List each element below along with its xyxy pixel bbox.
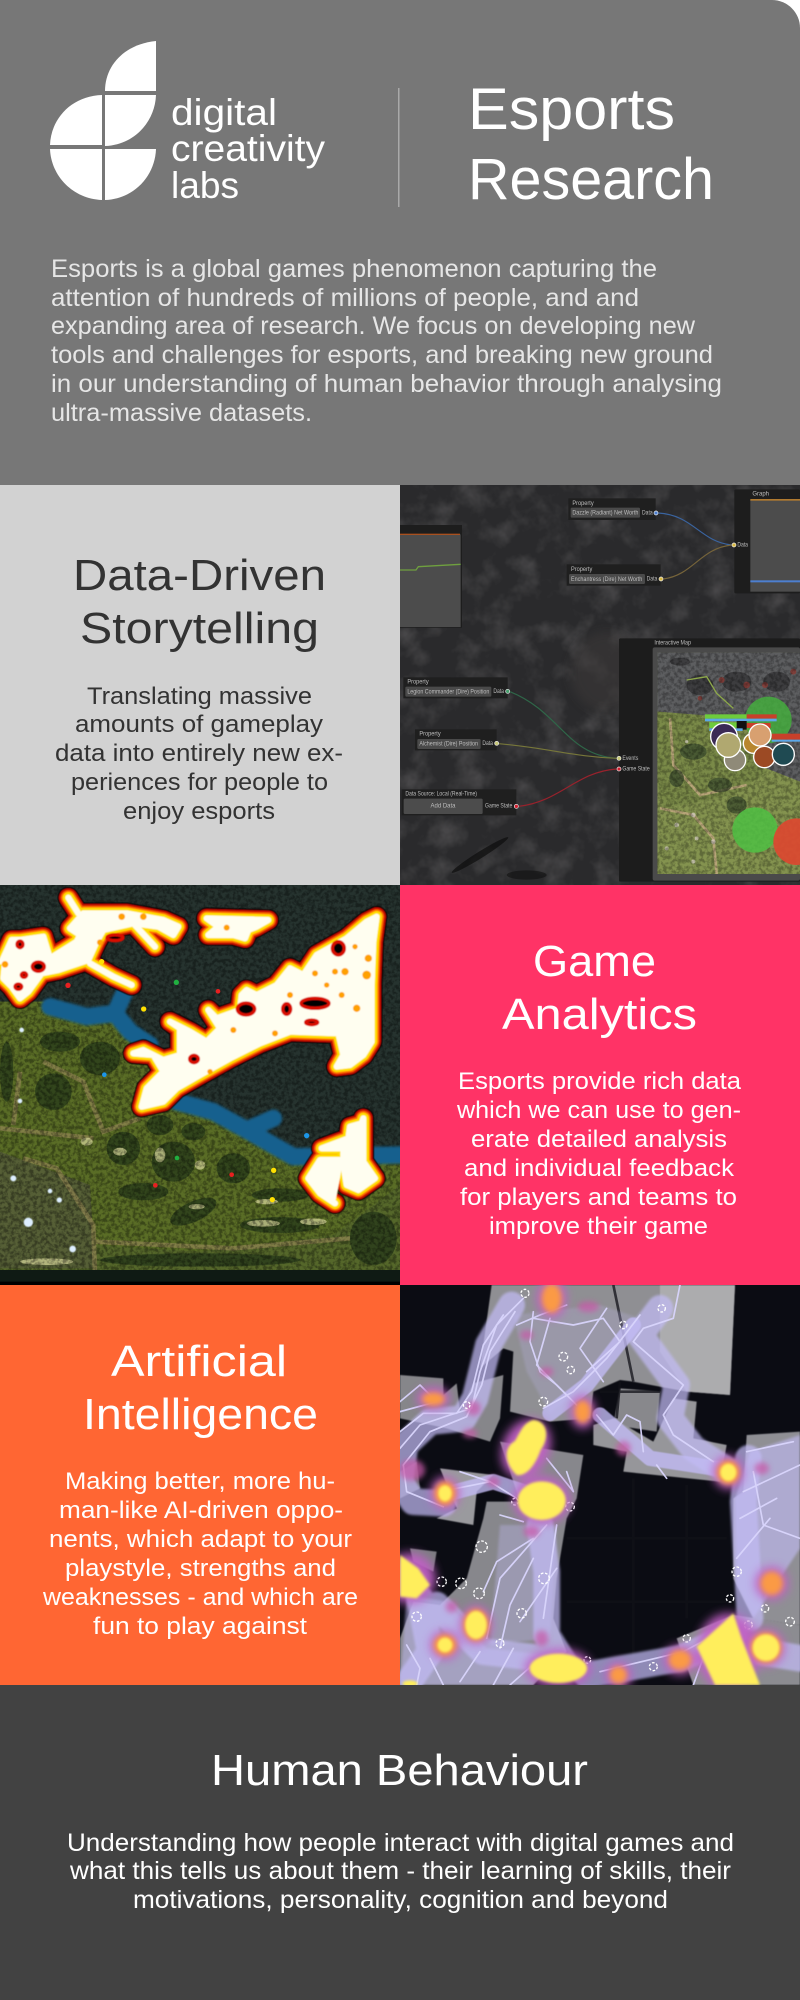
player dots: [65, 959, 309, 1202]
body text: storytelling: enjoy esports: [123, 798, 275, 825]
panel: game analytics: [400, 885, 800, 1285]
body text: artificial intelligence: playstyle, strengths and: [65, 1555, 336, 1582]
icon: digital creativity labs leaf logo: [50, 41, 156, 200]
body text: human behaviour: Understanding how people interact with digital games and: [67, 1829, 734, 1857]
body text: game analytics: which we can use to gen-: [456, 1097, 741, 1124]
node: alchemist position: [415, 729, 499, 750]
title: Research: [468, 147, 714, 212]
node: interactive map: Game State: [622, 767, 650, 773]
body text: storytelling: Translating massive: [87, 683, 312, 710]
image: AI movement trace map: [400, 1285, 800, 1685]
heading: game analytics: Game: [533, 937, 656, 986]
node: alchemist position: Data: [482, 741, 494, 747]
heading: artificial intelligence: [83, 1337, 318, 1439]
body text: artificial intelligence: Making better, more hu-: [65, 1468, 335, 1495]
trace map: waypoint markers: [412, 1289, 794, 1671]
node: enchantress net worth: Enchantress (Dire) Net Worth: [571, 577, 642, 583]
node: enchantress net worth: Property: [571, 567, 592, 573]
body text: storytelling: periences for people to: [71, 769, 328, 796]
intro text: ultra-massive datasets.: [51, 399, 312, 427]
intro text: expanding area of research. We focus on developing new: [51, 312, 696, 340]
node: alchemist position: Property: [419, 732, 441, 738]
body text: game analytics: improve their game: [489, 1213, 708, 1240]
heading: artificial intelligence: Artificial: [111, 1337, 287, 1386]
panel: header: [0, 0, 800, 485]
heading: artificial intelligence: Intelligence: [83, 1390, 318, 1439]
heading: data-driven storytelling: Data-Driven: [73, 551, 326, 600]
node: graph: [732, 489, 800, 593]
node: data source: Data Source: Local (Real-Time): [405, 792, 477, 798]
logo wordmark: creativity: [171, 128, 326, 169]
node: interactive map: Events: [622, 756, 638, 762]
connectors: [499, 513, 732, 806]
heatmap holes: [15, 935, 344, 1063]
body text: human behaviour: what this tells us about them - their learning of skills, their: [69, 1857, 731, 1885]
node: dazzle net worth: Dazzle (Radiant) Net Worth: [572, 511, 638, 517]
trace map: movement bundles: [400, 1285, 800, 1685]
body text: artificial intelligence: man-like AI-driven oppo-: [59, 1497, 343, 1524]
body text: human behaviour: motivations, personality, cognition and beyond: [133, 1886, 668, 1914]
node: interactive map: Interactive Map: [654, 640, 692, 646]
body text: artificial intelligence: weaknesses - and which are: [42, 1584, 358, 1611]
node: legion commander position: Legion Commander (Dire) Position: [407, 689, 489, 695]
intro text: in our understanding of human behavior through analysing: [51, 370, 722, 398]
node: dazzle net worth: [568, 498, 658, 520]
node: data source: Game State: [485, 804, 513, 810]
panel: human behaviour: [0, 1685, 800, 2000]
heatmap hot specks: [2, 913, 372, 1074]
node: alchemist position: Alchemist (Dire) Position: [419, 741, 478, 747]
body text: game analytics: for players and teams to: [460, 1184, 737, 1211]
title: Esports: [468, 77, 675, 142]
body text: storytelling: amounts of gameplay: [75, 711, 323, 738]
minimap: [657, 652, 800, 874]
minimap: terrain: [0, 885, 400, 1285]
vertical divider: [398, 88, 400, 207]
body text: game analytics: [456, 1068, 742, 1240]
node: legion commander position: [403, 677, 510, 698]
body text: human behaviour: [67, 1829, 734, 1914]
node: graph: Graph: [752, 492, 769, 498]
node: data source: [402, 789, 518, 815]
node: graph: Data: [737, 543, 749, 549]
intro text: [51, 255, 722, 427]
node: data source: Add Data: [430, 804, 456, 810]
trace map: bright heat spots: [400, 1420, 779, 1687]
body text: artificial intelligence: [42, 1468, 358, 1640]
heading: human behaviour: Human Behaviour: [211, 1746, 588, 1795]
logo wordmark: labs: [171, 165, 239, 206]
trace map: orange rims: [422, 1284, 783, 1684]
image: node graph data tool with interactive map: [400, 485, 800, 885]
node: dazzle net worth: Data: [642, 511, 653, 517]
body text: artificial intelligence: fun to play against: [93, 1613, 307, 1640]
node: interactive map: [617, 638, 800, 882]
title: [468, 77, 714, 212]
panel: artificial intelligence: [0, 1285, 400, 1685]
image: dota minimap heatmap: [0, 885, 400, 1285]
panel: data-driven storytelling: [0, 485, 400, 885]
node: legion commander position: Property: [407, 679, 429, 685]
node: top-left graph: [400, 525, 462, 628]
body text: storytelling: [55, 683, 343, 825]
intro text: attention of hundreds of millions of people, and and: [51, 284, 639, 312]
trace map: grey blocks: [400, 1285, 800, 1685]
body text: storytelling: data into entirely new ex-: [55, 740, 343, 767]
node: enchantress net worth: [567, 564, 663, 586]
intro text: Esports is a global games phenomenon capturing the: [51, 255, 657, 283]
node: dazzle net worth: Property: [572, 501, 594, 507]
trace map: pink smudges: [398, 1301, 769, 1646]
logo wordmark: digital: [171, 92, 277, 133]
minimap: river: [50, 993, 400, 1157]
node: legion commander position: Data: [493, 689, 505, 695]
heatmap blobs: [2, 898, 377, 1203]
body text: game analytics: and individual feedback: [464, 1155, 735, 1182]
logo wordmark: [171, 92, 326, 206]
heading: game analytics: [502, 937, 697, 1039]
heading: game analytics: Analytics: [502, 990, 697, 1039]
heading: data-driven storytelling: Storytelling: [80, 604, 319, 653]
intro text: tools and challenges for esports, and breaking new ground: [51, 341, 713, 369]
trace map: dark corridors: [567, 1285, 727, 1658]
trace map: pink glow under heat spots: [385, 1279, 788, 1690]
body text: artificial intelligence: nents, which adapt to your: [49, 1526, 352, 1553]
body text: game analytics: erate detailed analysis: [471, 1126, 727, 1153]
heading: data-driven storytelling: [73, 551, 326, 653]
node: enchantress net worth: Data: [647, 577, 658, 583]
body text: game analytics: Esports provide rich data: [458, 1068, 742, 1095]
